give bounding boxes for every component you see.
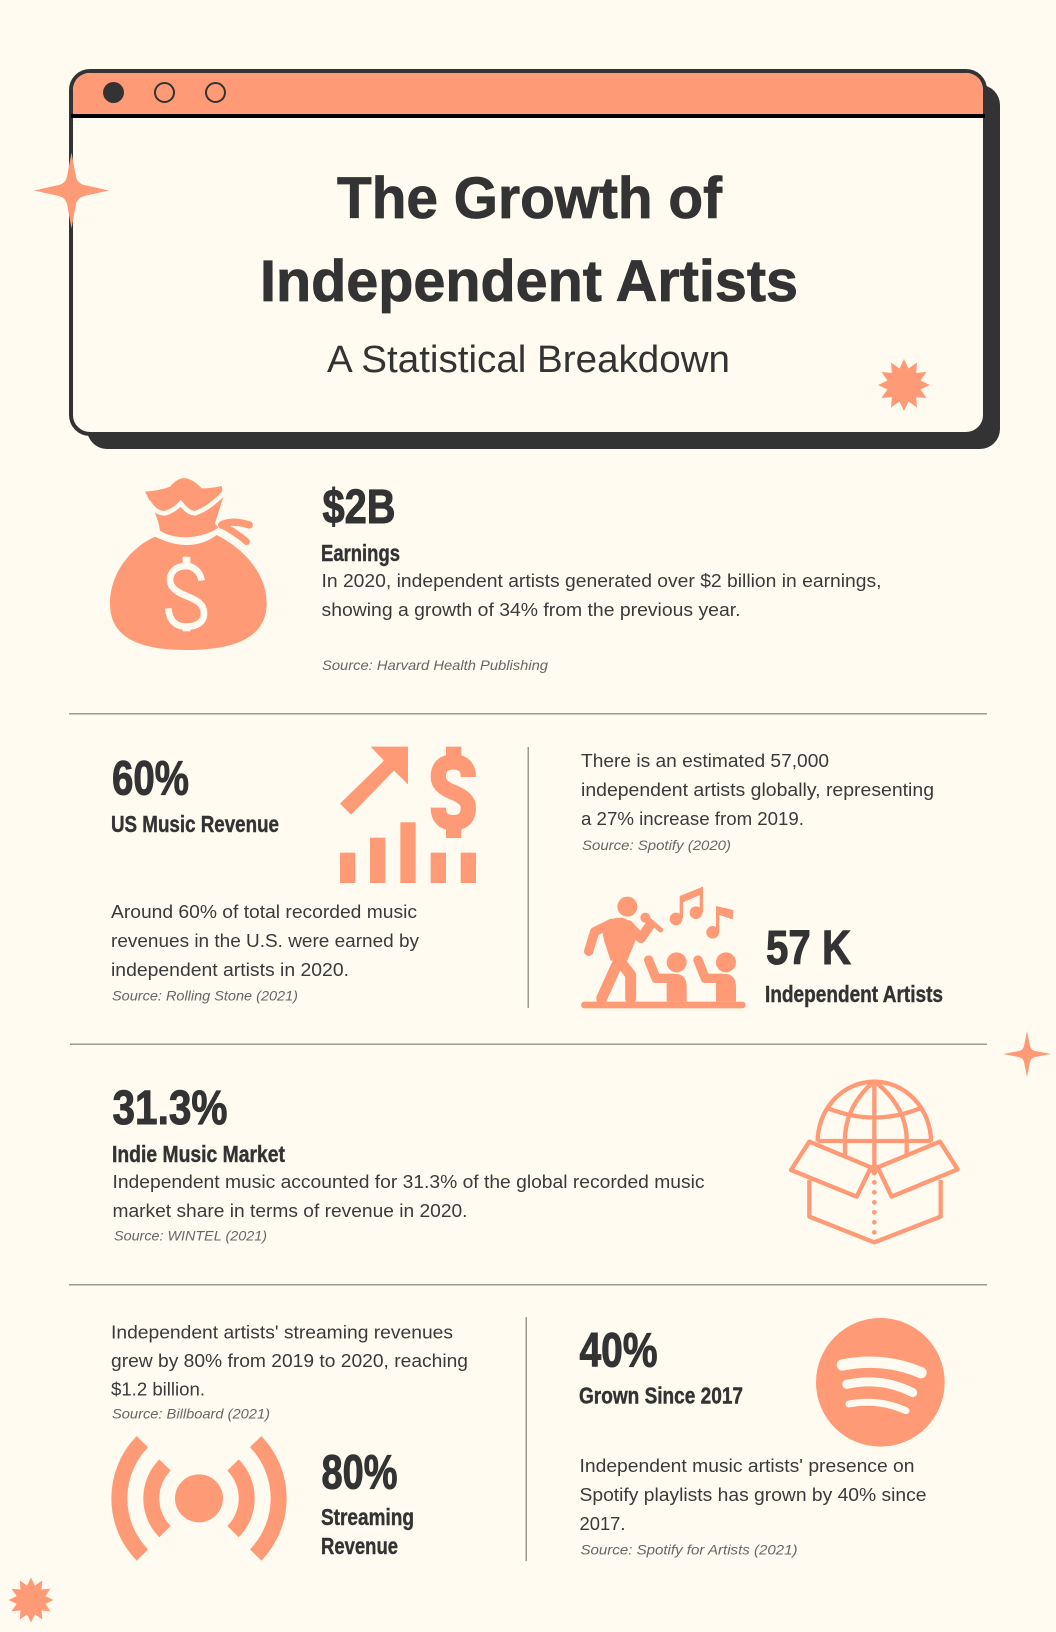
description [112,1172,704,1221]
icon: sparkle left [34,152,109,228]
icon: singer with audience [581,887,746,1008]
description: $1.2 billion. [111,1380,205,1400]
icon: broadcast signal [119,1442,279,1555]
description [322,571,882,620]
description: showing a growth of 34% from the previous year. [322,600,740,620]
description: grew by 80% from 2019 to 2020, reaching [111,1351,468,1371]
stat label [321,1504,414,1559]
icon: growth chart and dollar [340,747,476,883]
stat label: Grown Since 2017 [579,1382,743,1408]
stat: $2B [322,481,396,534]
description: independent artists in 2020. [111,960,349,980]
panel: indie music market [112,1081,958,1244]
description: There is an estimated 57,000 [581,751,829,771]
stat: 80% [322,1446,398,1500]
description: market share in terms of revenue in 2020. [112,1201,468,1221]
description: Spotify playlists has grown by 40% since [580,1485,926,1505]
description: In 2020, independent artists generated over $2 billion in earnings, [322,571,882,591]
window frame [71,71,985,434]
description [580,1456,926,1534]
window buttons [103,82,225,103]
panel: earnings [110,478,882,673]
stat label: Earnings [321,540,400,566]
panel: spotify growth [579,1318,945,1558]
stat label: Streaming [321,1504,414,1530]
description: Independent artists' streaming revenues [111,1322,453,1342]
description: revenues in the U.S. were earned by [111,931,419,951]
panel: independent artists count [581,751,943,1008]
source: Source: WINTEL (2021) [114,1228,267,1244]
stat: 57 K [766,922,851,975]
icon: spotify logo [816,1318,945,1447]
description: Independent music accounted for 31.3% of the global recorded music [112,1172,704,1192]
stat: 60% [112,752,189,806]
subtitle: A Statistical Breakdown [327,339,730,381]
window shadow [87,85,1000,449]
source: Source: Rolling Stone (2021) [112,988,298,1004]
title: Independent Artists [260,249,798,314]
icon: starburst bottom left [9,1578,54,1622]
stat: 40% [580,1324,658,1378]
description: 2017. [580,1514,626,1534]
icon: money bag [110,478,267,650]
window title bar [73,73,983,114]
icon: starburst in window [878,359,930,411]
stat label: Independent Artists [765,981,943,1007]
description [581,751,934,829]
panel: title window [71,71,1000,449]
title [260,166,798,314]
stat label: US Music Revenue [111,811,279,837]
icon: globe in box [791,1081,958,1242]
panel: US music revenue [111,747,476,1004]
description [111,1322,468,1400]
icon: sparkle right [1003,1031,1051,1077]
description [111,902,419,980]
title: The Growth of [337,166,723,231]
source: Source: Billboard (2021) [112,1406,270,1422]
stat label: Revenue [321,1533,398,1559]
source: Source: Harvard Health Publishing [322,657,548,673]
stat: 31.3% [112,1082,228,1135]
stat label: Indie Music Market [112,1141,285,1167]
source: Source: Spotify (2020) [582,837,731,853]
panel: streaming revenue [111,1322,468,1559]
description: independent artists globally, representing [581,780,934,800]
description: a 27% increase from 2019. [581,809,804,829]
source: Source: Spotify for Artists (2021) [580,1542,798,1558]
description: Independent music artists' presence on [580,1456,914,1476]
description: Around 60% of total recorded music [111,902,417,922]
